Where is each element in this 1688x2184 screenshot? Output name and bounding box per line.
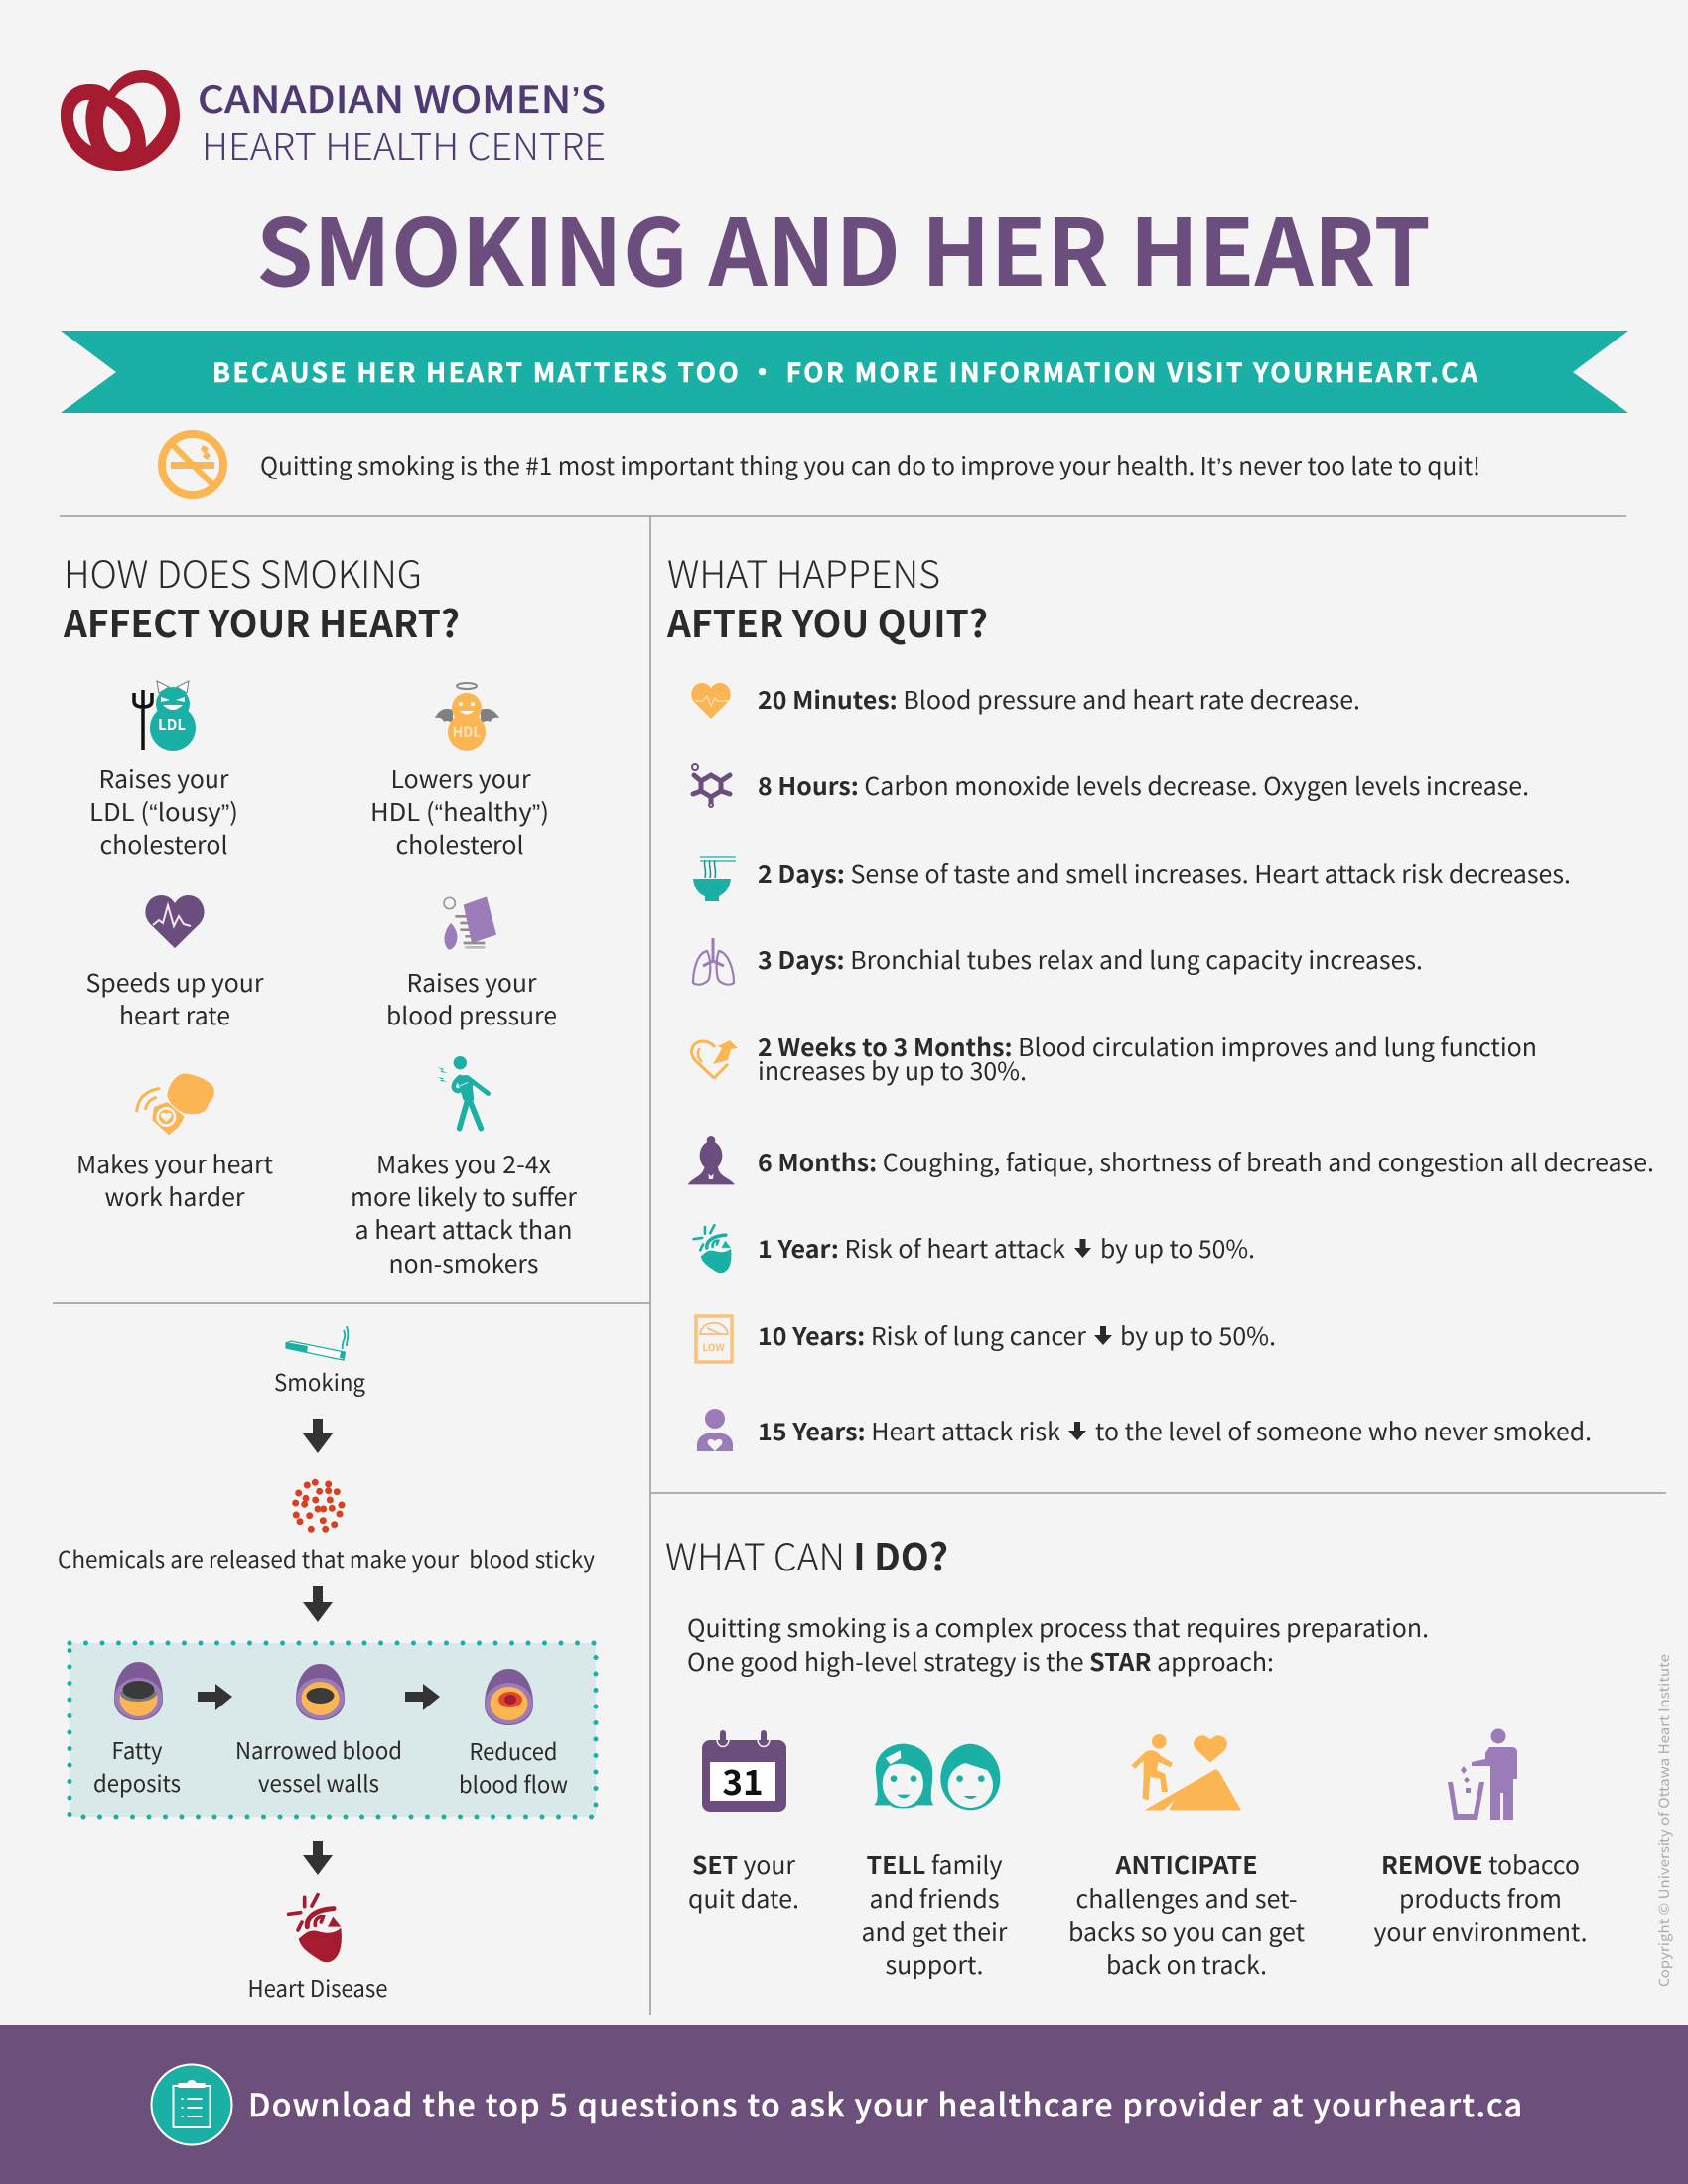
text: lowers HDL: Lowers your (391, 761, 531, 796)
text: speeds heart rate: Speeds up your (85, 965, 264, 1000)
text: raises LDL: cholesterol (99, 827, 228, 862)
text: 2 weeks to 3 months (758, 1029, 1537, 1088)
icon: orange heart pulse (691, 683, 731, 719)
panel: smoking to heart disease flow (58, 1326, 596, 2004)
text: raises LDL: LDL (“lousy”) (89, 794, 238, 829)
icon: molecule (692, 764, 730, 807)
arrow: down (303, 1586, 333, 1622)
icon: intertwined red heart (61, 70, 180, 171)
text: chemicals: Chemicals are released that make your blood sticky (58, 1541, 595, 1574)
text: speeds heart rate: heart rate (119, 998, 230, 1032)
icon: low gauge (696, 1316, 732, 1362)
arrow: down (303, 1419, 333, 1453)
text: heart attack risk: a heart attack than (355, 1212, 572, 1247)
text: anticipate: challenges and set- (1076, 1881, 1297, 1916)
text: star approach intro: One good high-level strategy is the STAR approach: (687, 1644, 1274, 1679)
intro text: Quitting smoking is the #1 most important thing you can do to improve your health. It’s never too late to quit! (260, 448, 1480, 482)
text: heart work harder: work harder (105, 1179, 245, 1214)
text: 8 hours: 8 Hours: Carbon monoxide levels decrease. Oxygen levels increase. (758, 768, 1529, 803)
text: 1 year: 1 Year: Risk of heart attack (758, 1231, 1065, 1266)
text: 10 years: 10 Years: Risk of lung cancer (758, 1318, 1086, 1353)
text: 2 weeks to 3 months: 2 Weeks to 3 Months: Blood circulation improves and lung function (758, 1029, 1537, 1064)
text: 20 minutes: 20 Minutes: Blood pressure and heart rate decrease. (758, 682, 1360, 717)
text: 15 years (758, 1414, 1592, 1448)
text: anticipate (1068, 1847, 1305, 1981)
icon: HDL angel (435, 683, 499, 751)
text: anticipate: ANTICIPATE (1114, 1847, 1257, 1882)
text: remove tobacco: products from (1399, 1881, 1562, 1916)
icon: climber and heart (1131, 1734, 1241, 1810)
text: heart work harder: Makes your heart (76, 1147, 273, 1181)
heading: what happens (666, 544, 988, 648)
icon: person having heart attack (437, 1056, 489, 1129)
text: anticipate: backs so you can get (1068, 1914, 1305, 1949)
text: 10 years: by up to 50%. (1120, 1318, 1276, 1353)
icon: fist squeezing heart (137, 1073, 214, 1135)
text: anticipate: back on track. (1106, 1947, 1267, 1981)
text: raises blood pressure: Raises your (407, 965, 537, 1000)
text: set quit date: SET your (692, 1847, 795, 1882)
icon: blood pressure cuff (444, 896, 496, 950)
arrow: right (405, 1684, 440, 1710)
icon: noodle bowl (693, 857, 736, 901)
text: tell family: TELL family (866, 1847, 1003, 1882)
text: raises LDL (89, 761, 238, 862)
text: 3 days: 3 Days: Bronchial tubes relax and lung capacity increases. (758, 942, 1423, 977)
arrow: down (303, 1841, 333, 1875)
text: raises LDL: Raises your (99, 761, 229, 796)
icon: LDL devil: LDL (158, 714, 186, 735)
heading: what happens: AFTER YOU QUIT? (666, 594, 988, 648)
text: reduced blood flow: blood flow (459, 1766, 568, 1800)
footer band (0, 2025, 1688, 2184)
icon: calendar: 31 (722, 1755, 764, 1806)
arrow: right (198, 1684, 232, 1710)
icon: fatty deposits vessel (114, 1662, 163, 1720)
text: 2 weeks to 3 months: increases by up to 30%. (758, 1053, 1027, 1088)
text: lowers HDL: HDL (“healthy”) (370, 794, 549, 829)
panel: artery stages (70, 1643, 596, 1817)
text: heart disease: Heart Disease (248, 1971, 387, 2004)
title: SMOKING AND HER HEART (256, 179, 1431, 313)
text: fatty deposits (93, 1732, 181, 1799)
icon: heart with upward arrow (692, 1040, 738, 1078)
text: narrowed vessel walls (235, 1732, 402, 1799)
text: 2 days: 2 Days: Sense of taste and smell increases. Heart attack risk decreases. (758, 856, 1571, 890)
text: 15 years: 15 Years: Heart attack risk (758, 1414, 1060, 1448)
text: fatty deposits: deposits (93, 1765, 181, 1799)
heading: how does smoking: HOW DOES SMOKING (64, 544, 422, 599)
text: 10 years (758, 1318, 1276, 1353)
icon: girl and boy faces (874, 1744, 1000, 1810)
text: heart attack risk: Makes you 2-4x (376, 1147, 551, 1181)
text: raises blood pressure (386, 965, 557, 1032)
text: tell family (862, 1847, 1008, 1981)
banner ribbon (61, 331, 1628, 413)
text: 1 year (758, 1231, 1255, 1266)
text: download call to action: Download the top 5 questions to ask your healthcare provider at yourheart.ca (248, 2081, 1522, 2126)
heading: how does smoking (63, 544, 460, 648)
logo wordmark (198, 70, 606, 171)
text: heart attack risk: non-smokers (389, 1246, 538, 1281)
text: heart work harder (76, 1147, 273, 1214)
panel: what can I do (665, 1527, 1587, 1981)
icon: person binning tobacco (1448, 1729, 1517, 1820)
text: 15 years: to the level of someone who never smoked. (1095, 1414, 1592, 1448)
text: narrowed vessel walls: vessel walls (258, 1765, 379, 1799)
logo: Canadian Women's Heart Health Centre (61, 70, 606, 171)
heading: what happens: WHAT HAPPENS (667, 544, 940, 599)
copyright note: Copyright © University of Ottawa Heart Institute (1654, 1654, 1674, 1987)
icon: anatomical heart (289, 1895, 342, 1962)
text: 1 year: by up to 50%. (1100, 1231, 1255, 1266)
icon: purple heart with pulse (145, 895, 205, 948)
text: set quit date: quit date. (688, 1881, 799, 1916)
text: set quit date (688, 1847, 799, 1916)
icon: LDL devil (134, 681, 196, 751)
text: fatty deposits: Fatty (111, 1732, 163, 1766)
icon: teal anatomical heart (694, 1225, 731, 1273)
icon: reduced flow vessel (485, 1669, 533, 1725)
icon: lungs (693, 938, 734, 985)
text: heart attack risk (351, 1147, 577, 1281)
text: remove tobacco (1374, 1847, 1587, 1949)
heading: what can I do: WHAT CAN I DO? (665, 1527, 948, 1581)
text: heart attack risk: more likely to suffer (351, 1179, 577, 1214)
banner ribbon: BECAUSE HER HEART MATTERS TOO • FOR MORE INFORMATION VISIT YOURHEART.CA (212, 351, 1478, 390)
icon: clipboard (151, 2065, 232, 2144)
text: reduced blood flow: Reduced (469, 1733, 558, 1767)
icon: narrowed vessel (296, 1664, 345, 1720)
text: star approach intro: Quitting smoking is a complex process that requires preparation. (687, 1610, 1429, 1645)
text: tell family: and get their (862, 1914, 1008, 1949)
text: smoking: Smoking (274, 1364, 365, 1398)
icon: cigarette (286, 1326, 348, 1360)
icon: calendar (702, 1733, 786, 1812)
text: tell family: and friends (870, 1881, 999, 1916)
heading: how does smoking: AFFECT YOUR HEART? (63, 594, 460, 648)
logo wordmark: HEART HEALTH CENTRE (202, 117, 606, 171)
text: lowers HDL (370, 761, 549, 862)
text: 6 months: 6 Months: Coughing, fatique, shortness of breath and congestion all decrease. (758, 1145, 1654, 1179)
text: star approach intro (687, 1610, 1429, 1679)
panel: how does smoking affect your heart (63, 544, 577, 1281)
icon: woman silhouette (688, 1136, 735, 1184)
text: remove tobacco: REMOVE tobacco (1381, 1847, 1580, 1882)
icon: no smoking (162, 434, 223, 495)
icon: HDL angel: HDL (453, 722, 481, 742)
text: lowers HDL: cholesterol (395, 827, 524, 862)
panel: what happens after you quit (666, 544, 1654, 1451)
text: remove tobacco: your environment. (1374, 1914, 1587, 1949)
text: tell family: support. (886, 1947, 983, 1981)
logo wordmark: CANADIAN WOMEN ’S (198, 70, 606, 124)
icon: sticky blood cells (292, 1479, 346, 1533)
text: raises blood pressure: blood pressure (386, 998, 557, 1032)
icon: person with heart (697, 1409, 733, 1451)
text: reduced blood flow (459, 1733, 568, 1800)
icon: low gauge: LOW (702, 1339, 725, 1354)
text: narrowed vessel walls: Narrowed blood (235, 1732, 402, 1766)
text: speeds heart rate (85, 965, 264, 1032)
